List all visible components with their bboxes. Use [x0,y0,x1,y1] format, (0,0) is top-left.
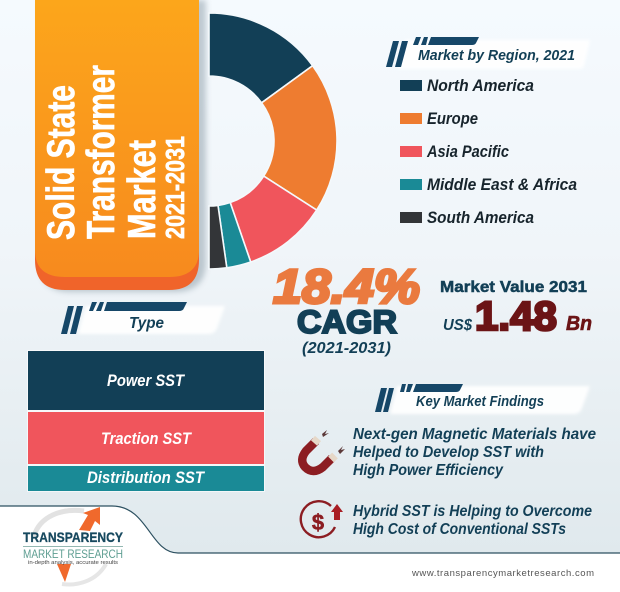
heading: market by region [386,37,590,69]
finding text: magnetic materials: High Power Efficiency [353,462,504,479]
icon: dollar with up arrow [301,501,343,537]
banner title text: Market [121,140,164,239]
donut chart: market by region [209,13,337,269]
segment: Distribution SST [28,466,264,491]
segment: Traction SST [28,412,264,464]
legend item: Asia Pacific: Asia Pacific [426,142,509,161]
icon: dollar with up arrow: $ [312,510,324,535]
finding text: hybrid SST [353,503,592,538]
legend item: Asia Pacific [400,142,509,161]
segment: Distribution SST: Distribution SST [87,468,205,487]
heading: type: Type [129,315,164,332]
stacked bar: type [27,350,265,492]
CAGR figure: CAGR [297,304,397,340]
logo: Transparency Market Research [23,507,124,584]
logo: Transparency Market Research: MARKET RESEARCH [23,547,123,561]
finding text: magnetic materials [353,426,596,479]
market value figure: Bn [566,313,592,335]
logo: Transparency Market Research: TRANSPARENCY [23,529,124,545]
icon: magnet [302,430,345,471]
legend item: North America: North America [427,76,534,95]
finding text: hybrid SST: High Cost of Conventional SSTs [353,521,566,538]
CAGR figure: 18.4% [273,261,420,314]
segment: Traction SST: Traction SST [101,429,192,448]
CAGR figure: (2021-2031) [302,340,391,357]
finding text: magnetic materials: Next-gen Magnetic Materials have [353,426,596,443]
CAGR figure [273,261,420,357]
segment: Power SST [28,351,264,410]
legend item: Europe: Europe [427,109,478,128]
heading: key market findings: Key Market Findings [416,393,544,410]
market value figure: Market Value 2031 [440,279,587,296]
legend item: South America: South America [427,208,534,227]
title banner [35,0,206,292]
market value figure: 1.48 [475,293,557,339]
heading: type [61,302,225,334]
segment: Power SST: Power SST [107,371,185,390]
market value figure [440,279,592,339]
banner title text: Transformer [80,65,123,239]
market value figure: US$ [443,317,473,334]
legend: regions [400,76,577,227]
legend item: Middle East and Africa: Middle East & Africa [427,175,577,194]
banner title text [40,65,190,240]
legend item: Europe [400,109,478,128]
heading: key market findings [375,384,590,414]
logo: Transparency Market Research: in-depth analysis, accurate results [28,560,119,566]
heading: market by region: Market by Region, 2021 [418,47,575,64]
banner title text: 2021-2031 [160,136,190,239]
finding text: magnetic materials: Helped to Develop SST with [353,444,544,461]
website url: www.transparencymarketresearch.com [411,568,594,579]
finding text: hybrid SST: Hybrid SST is Helping to Overcome [353,503,592,520]
banner title text: Solid State [40,85,83,240]
